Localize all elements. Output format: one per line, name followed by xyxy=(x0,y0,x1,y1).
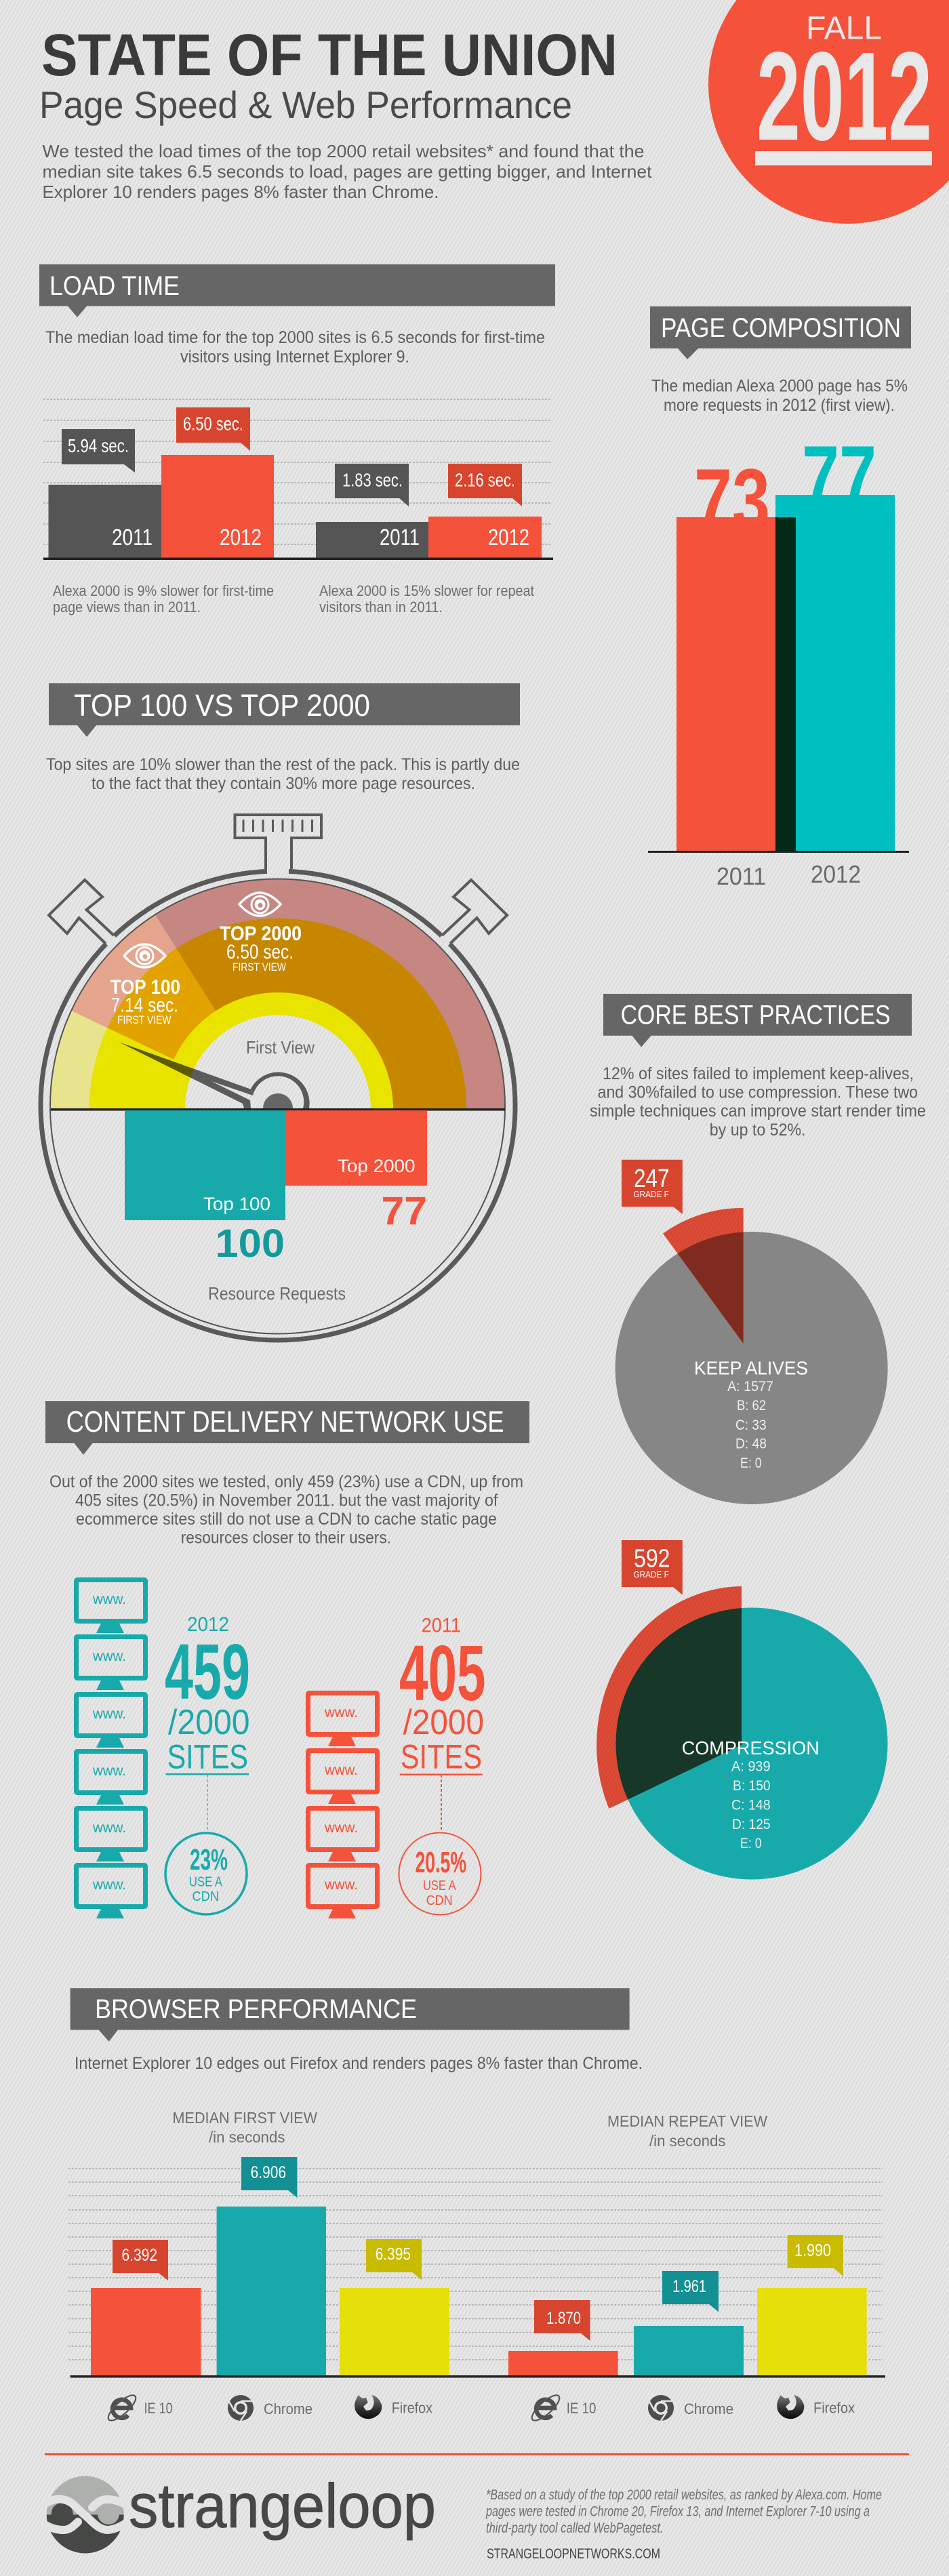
callout: 1.990 xyxy=(788,2235,843,2276)
panel: top 100 vs top 2000 xyxy=(41,683,520,1340)
callout: 2.16 sec xyxy=(448,464,522,506)
callout: 6.906: 6.906 xyxy=(251,2163,286,2182)
title: STATE OF THE UNION xyxy=(41,22,618,88)
icons: teal monitors 2012: www. xyxy=(92,1763,126,1779)
chart title: median repeat view: /in seconds xyxy=(649,2132,725,2150)
label: top 100 first view: 7.14 sec. xyxy=(111,994,178,1017)
heading: page composition: PAGE COMPOSITION xyxy=(661,313,901,343)
panel: page composition xyxy=(648,306,911,890)
callout: 247 grade f: 247 xyxy=(634,1165,670,1193)
gauge needle xyxy=(119,1042,310,1108)
chart title: median first view: /in seconds xyxy=(209,2129,285,2146)
icons: teal monitors 2012: www. xyxy=(92,1877,126,1893)
icons: orange monitors 2011: www. xyxy=(324,1877,358,1893)
core best practices description: and 30%failed to use compression. These two xyxy=(598,1083,918,1102)
pie chart: compression: B: 150 xyxy=(733,1778,771,1794)
callout: 1.870 xyxy=(534,2300,590,2341)
heading: content delivery network use xyxy=(45,1401,529,1455)
intro text xyxy=(42,141,652,202)
stat circle: 23% use a cdn: 23% xyxy=(190,1843,228,1876)
browser legend: repeat view: Chrome xyxy=(684,2400,733,2417)
stat circle: 23% use a cdn: CDN xyxy=(193,1889,219,1904)
callout: 592 grade f: 592 xyxy=(634,1545,670,1573)
stat circle: 23% use a cdn: USE A xyxy=(189,1875,223,1890)
icons: orange monitors 2011: www. xyxy=(324,1763,358,1778)
icons: orange monitors 2011: www. xyxy=(324,1820,358,1836)
callout: 1.83 sec: 1.83 sec. xyxy=(342,469,403,491)
bar: top 2000 requests xyxy=(285,1110,427,1233)
bar chart: load time xyxy=(43,455,553,560)
page composition description: The median Alexa 2000 page has 5% xyxy=(651,377,908,396)
callout: 5.94 sec xyxy=(62,429,135,472)
icons: teal monitors 2012: www. xyxy=(92,1706,126,1722)
icon: top 2000 eye xyxy=(239,893,281,916)
callout: 6.906 xyxy=(241,2157,297,2198)
label: top 100 first view: TOP 100 xyxy=(110,976,180,999)
bar chart: requests: 2011 xyxy=(716,862,766,890)
callout: 247 grade f: GRADE F xyxy=(633,1189,669,1199)
icons: teal monitors 2012: www. xyxy=(92,1649,126,1664)
heading: load time: LOAD TIME xyxy=(49,271,180,301)
stat circle: 20.5% use a cdn: USE A xyxy=(423,1878,456,1893)
pie chart: keep alives: A: 1577 xyxy=(727,1379,773,1394)
stat circle: 23% use a cdn xyxy=(165,1833,247,1914)
footer xyxy=(45,2472,882,2562)
panel: content delivery network use xyxy=(45,1401,529,1918)
bar: top 100 requests: Top 100 xyxy=(203,1194,270,1214)
bar: top 100 requests xyxy=(125,1110,285,1266)
bar: top 2000 requests: 77 xyxy=(381,1189,427,1233)
icon: internet explorer repeat xyxy=(529,2392,563,2424)
callout: 5.94 sec: 5.94 sec. xyxy=(68,435,129,456)
footnote xyxy=(485,2487,882,2536)
logo: strangeloop: strangeloop xyxy=(129,2472,436,2541)
pie chart: compression xyxy=(597,1586,888,1879)
callout: 247 grade f xyxy=(622,1160,683,1214)
intro text: We tested the load times of the top 2000 retail websites* and found that the xyxy=(42,141,645,161)
pie chart: keep alives: KEEP ALIVES xyxy=(694,1358,808,1379)
callout: 6.392: 6.392 xyxy=(122,2246,157,2265)
icon: chrome repeat xyxy=(648,2395,674,2421)
logo: strangeloop xyxy=(45,2472,436,2553)
bar chart: median repeat view xyxy=(508,2288,867,2375)
callout: 1.961: 1.961 xyxy=(672,2277,706,2296)
pie chart: compression: COMPRESSION xyxy=(682,1737,820,1758)
label: top 100 first view: FIRST VIEW xyxy=(117,1013,171,1026)
stat: 459 of 2000 sites in 2012 xyxy=(165,1613,250,1832)
callout: 6.395 xyxy=(366,2239,422,2280)
browser legend: repeat view: IE 10 xyxy=(567,2400,597,2417)
pie chart: keep alives xyxy=(615,1208,888,1504)
chart title: median repeat view: MEDIAN REPEAT VIEW xyxy=(607,2112,767,2130)
cdn description: Out of the 2000 sites we tested, only 459 (23%) use a CDN, up from xyxy=(49,1472,523,1491)
bar chart: load time: 2011 xyxy=(112,525,153,550)
stat: 459 of 2000 sites in 2012: 2012 xyxy=(187,1613,229,1636)
icons: orange monitors 2011 xyxy=(308,1693,377,1918)
icon: firefox repeat xyxy=(777,2395,804,2419)
callout: 6.50 sec: 6.50 sec. xyxy=(183,414,243,434)
core best practices description xyxy=(590,1064,926,1140)
core best practices description: by up to 52%. xyxy=(710,1121,805,1140)
core best practices description: 12% of sites failed to implement keep-alives, xyxy=(603,1064,914,1083)
bar: top 100 requests: 100 xyxy=(216,1222,285,1266)
top 100 description: to the fact that they contain 30% more page resources. xyxy=(92,774,475,793)
label: top 2000 first view xyxy=(220,923,302,973)
website url: STRANGELOOPNETWORKS.COM xyxy=(487,2546,660,2562)
chart title: median first view xyxy=(172,2109,317,2146)
heading: browser performance xyxy=(70,1988,630,2042)
stat circle: 20.5% use a cdn: 20.5% xyxy=(415,1846,466,1879)
stopwatch xyxy=(41,815,515,1340)
icon: firefox xyxy=(355,2395,382,2419)
heading: page composition xyxy=(650,306,911,359)
cdn description: 405 sites (20.5%) in November 2011. but the vast majority of xyxy=(75,1491,498,1510)
pie chart: keep alives: B: 62 xyxy=(737,1398,766,1413)
callout: 6.395: 6.395 xyxy=(376,2245,411,2264)
badge: fall 2012 xyxy=(708,0,949,224)
caption: repeat views: Alexa 2000 is 15% slower for repeat xyxy=(319,582,534,599)
badge: fall 2012: FALL xyxy=(806,11,882,46)
label: top 2000 first view: TOP 2000 xyxy=(220,923,302,945)
bar chart: requests: 73 xyxy=(694,450,770,549)
page composition description: more requests in 2012 (first view). xyxy=(664,396,895,415)
bar chart: requests xyxy=(648,427,909,890)
chart title: median repeat view xyxy=(607,2112,767,2150)
panel: core best practices xyxy=(590,994,926,1879)
heading: core best practices xyxy=(603,994,912,1047)
callout: 1.961 xyxy=(662,2271,719,2312)
callout: 592 grade f: GRADE F xyxy=(633,1569,669,1579)
subtitle: Page Speed & Web Performance xyxy=(39,83,572,126)
icons: teal monitors 2012: www. xyxy=(92,1592,126,1607)
browser legend: repeat view: Firefox xyxy=(813,2400,855,2417)
label: resource requests: Resource Requests xyxy=(208,1283,346,1304)
stat: 459 of 2000 sites in 2012: 459 xyxy=(165,1628,250,1716)
pie chart: compression: D: 125 xyxy=(732,1817,771,1832)
label: top 100 first view xyxy=(110,976,180,1026)
label: top 2000 first view: FIRST VIEW xyxy=(233,961,286,973)
page composition description xyxy=(651,377,908,415)
heading: top 100 vs top 2000 xyxy=(49,683,520,737)
top 100 description: Top sites are 10% slower than the rest of the pack. This is partly due xyxy=(46,755,520,774)
caption: first-time views xyxy=(53,582,274,616)
callout: 1.990: 1.990 xyxy=(794,2241,831,2260)
bar chart: requests: 77 xyxy=(802,427,876,526)
icons: teal monitors 2012: www. xyxy=(92,1820,126,1836)
bar: top 2000 requests: Top 2000 xyxy=(338,1156,415,1176)
caption: first-time views: Alexa 2000 is 9% slower for first-time xyxy=(53,582,274,599)
gauge: first view xyxy=(50,879,506,1109)
heading: core best practices: CORE BEST PRACTICES xyxy=(621,1001,891,1030)
chart title: median first view: MEDIAN FIRST VIEW xyxy=(172,2109,317,2127)
stat: 405 of 2000 sites in 2011: 405 xyxy=(399,1629,485,1717)
header xyxy=(39,22,652,202)
label: first view: First View xyxy=(246,1037,315,1058)
stat: 405 of 2000 sites in 2011: /2000 xyxy=(403,1703,484,1742)
caption: repeat views xyxy=(319,582,534,616)
stat circle: 20.5% use a cdn xyxy=(399,1833,481,1914)
callout: 1.83 sec xyxy=(335,464,409,506)
callout: 6.50 sec xyxy=(176,407,250,451)
load time description xyxy=(45,328,545,366)
bar chart: load time: 2012 xyxy=(488,525,529,550)
cdn description: resources closer to their users. xyxy=(181,1529,391,1548)
load time description: The median load time for the top 2000 sites is 6.5 seconds for first-time xyxy=(45,328,545,347)
load time description: visitors using Internet Explorer 9. xyxy=(180,347,409,366)
browser legend: first view: IE 10 xyxy=(144,2400,172,2417)
pie chart: keep alives: D: 48 xyxy=(735,1436,767,1452)
pie chart: keep alives: C: 33 xyxy=(735,1417,767,1433)
pie chart: keep alives: E: 0 xyxy=(740,1455,762,1471)
bar chart: load time: 2011 xyxy=(380,525,420,550)
browser legend: first view: Chrome xyxy=(264,2400,312,2417)
heading: browser performance: BROWSER PERFORMANCE xyxy=(95,1994,417,2024)
browser legend: first view xyxy=(105,2392,432,2424)
browser legend: repeat view xyxy=(529,2392,855,2424)
icon: chrome xyxy=(228,2395,254,2421)
stat circle: 20.5% use a cdn: CDN xyxy=(426,1893,453,1908)
caption: repeat views: visitors than in 2011. xyxy=(319,599,443,616)
pie chart: compression: C: 148 xyxy=(731,1798,771,1813)
bar chart: requests: 2012 xyxy=(811,860,861,888)
cdn description xyxy=(49,1472,523,1548)
stat: 405 of 2000 sites in 2011: 2011 xyxy=(422,1615,461,1637)
bar chart: median first view xyxy=(91,2207,449,2375)
icon: internet explorer xyxy=(105,2392,139,2424)
callout: 2.16 sec: 2.16 sec. xyxy=(455,469,515,491)
panel: browser performance xyxy=(68,1988,885,2424)
stopwatch case xyxy=(41,815,515,1340)
label: top 2000 first view: 6.50 sec. xyxy=(226,941,294,963)
cdn description: ecommerce sites still do not use a CDN to cache static page xyxy=(76,1510,497,1529)
stat: 459 of 2000 sites in 2012: /2000 xyxy=(168,1703,250,1742)
top 100 description xyxy=(46,755,520,793)
pie chart: compression: E: 0 xyxy=(740,1836,762,1851)
stat: 405 of 2000 sites in 2011: SITES xyxy=(401,1738,482,1776)
intro text: median site takes 6.5 seconds to load, pages are getting bigger, and Internet xyxy=(42,161,652,182)
panel: load time xyxy=(39,264,555,616)
bar chart: load time: 2012 xyxy=(220,525,262,550)
heading: load time xyxy=(39,264,555,317)
browser description: Internet Explorer 10 edges out Firefox and renders pages 8% faster than Chrome. xyxy=(75,2054,643,2073)
icons: orange monitors 2011: www. xyxy=(324,1705,358,1720)
stat: 459 of 2000 sites in 2012: SITES xyxy=(167,1738,248,1776)
heading: content delivery network use: CONTENT DELIVERY NETWORK USE xyxy=(66,1405,504,1438)
callout: 592 grade f xyxy=(622,1540,683,1595)
caption: first-time views: page views than in 2011. xyxy=(53,599,201,616)
icon: top 100 eye xyxy=(124,944,165,967)
core best practices description: simple techniques can improve start render time xyxy=(590,1102,926,1121)
callout: 1.870: 1.870 xyxy=(546,2309,581,2328)
icons: teal monitors 2012 xyxy=(76,1579,145,1918)
pie chart: compression: A: 939 xyxy=(731,1758,771,1775)
heading: top 100 vs top 2000: TOP 100 VS TOP 2000 xyxy=(74,688,370,723)
callout: 6.392 xyxy=(113,2240,168,2280)
footnote: third-party tool called WebPagetest. xyxy=(486,2520,664,2536)
browser legend: first view: Firefox xyxy=(392,2400,432,2417)
stat: 405 of 2000 sites in 2011 xyxy=(399,1615,485,1832)
intro text: Explorer 10 renders pages 8% faster than Chrome. xyxy=(42,182,439,202)
